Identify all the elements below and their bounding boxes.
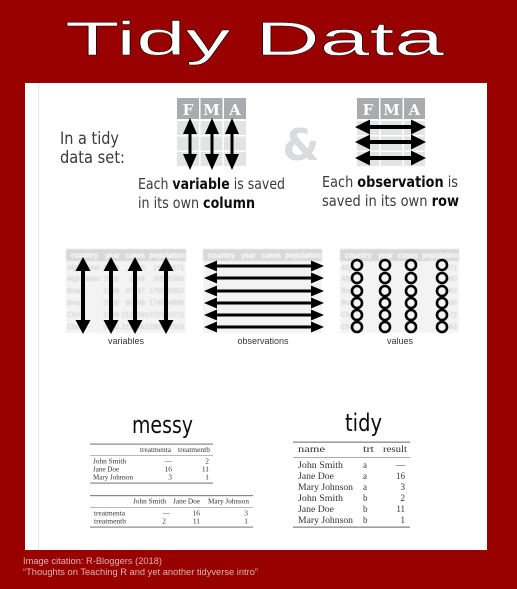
icon: column table with vertical arrows <box>177 98 246 170</box>
table: tidy: a <box>363 482 367 492</box>
diagram: variables: population <box>149 250 185 260</box>
heading: tidy: tidy <box>345 409 382 437</box>
diagram: variables: 1999 <box>103 288 119 295</box>
diagram: variables: 212258 <box>122 312 145 319</box>
heading: messy: messy <box>132 411 193 439</box>
table: messy, treatments as columns: treatmenta <box>140 445 172 454</box>
diagram: variables: 2000 <box>103 300 119 307</box>
diagram: variables: 2000 <box>103 276 119 283</box>
diagram: observations <box>203 249 324 346</box>
table: messy, treatments as columns: 11 <box>202 464 209 474</box>
diagram: variables: 20595360 <box>153 276 184 283</box>
table: messy, treatments as columns: John Smith <box>93 456 126 466</box>
table: tidy: John Smith <box>298 460 344 470</box>
table: tidy: b <box>363 493 368 503</box>
diagram: values: Bra <box>341 288 352 295</box>
table: messy, people as columns: 3 <box>244 508 248 518</box>
diagram: variables: 1999 <box>103 312 119 319</box>
diagram: values: 272 <box>445 312 457 319</box>
table: tidy: — <box>395 460 406 470</box>
table: messy, people as columns: Mary Johnson <box>208 496 249 506</box>
diagram: observations: country <box>208 250 235 260</box>
table: tidy: John Smith <box>298 493 344 503</box>
table: messy, treatments as columns: Mary Johnson <box>93 472 133 482</box>
caption: variable: Each variable is saved <box>138 175 285 193</box>
diagram: values: Chi <box>341 312 352 319</box>
icon: column table with vertical arrows: A <box>228 101 241 119</box>
diagram: values: 360 <box>445 276 457 283</box>
table: messy, people as columns: treatmenta <box>94 508 126 518</box>
diagram: variables: Afghanistan <box>67 276 100 283</box>
diagram: values: Bra <box>341 300 352 307</box>
icon: row table with horizontal arrows: M <box>383 101 400 119</box>
icon: column table with vertical arrows: M <box>203 101 220 119</box>
table: tidy: Jane Doe <box>298 471 334 481</box>
icon: row table with horizontal arrows: A <box>408 101 421 119</box>
table: messy, people as columns: John Smith <box>133 496 166 506</box>
table: messy, treatments as columns: 3 <box>168 472 172 482</box>
caption: variable: in its own column <box>138 194 255 212</box>
diagram: values: Afg <box>341 276 352 283</box>
diagram: variables <box>66 249 186 346</box>
table: messy, treatments as columns: — <box>164 456 173 466</box>
diagram: variables: year <box>105 250 121 260</box>
table: tidy: b <box>363 504 368 514</box>
title: Tidy Data <box>65 12 446 65</box>
table: messy, treatments as columns: treatmentb <box>178 445 210 454</box>
diagram: variables: 1280428583 <box>145 324 184 331</box>
panel: white content card <box>25 83 487 550</box>
table: tidy: a <box>363 471 367 481</box>
caption: variable <box>138 175 285 212</box>
table: messy, people as columns: 16 <box>193 508 200 518</box>
diagram: variables: 1999 <box>103 265 119 272</box>
diagram: variables: China <box>67 324 85 331</box>
table: tidy: 16 <box>396 471 406 481</box>
diagram: values <box>340 249 459 346</box>
diagram: variables: 80488 <box>126 300 145 307</box>
citation: Image citation: R-Bloggers (2018) <box>23 556 162 566</box>
table: tidy: 1 <box>400 515 405 525</box>
table: tidy: b <box>363 515 368 525</box>
citation <box>23 556 258 577</box>
table: messy, people as columns: treatmentb <box>94 516 126 526</box>
caption: observation <box>322 173 459 210</box>
diagram: values: country <box>345 250 372 260</box>
table: messy, treatments as columns <box>90 444 213 484</box>
diagram: values: year <box>378 250 394 260</box>
diagram: variables: Brazil <box>67 300 85 307</box>
caption: observation: Each observation is <box>322 173 458 191</box>
table: messy, treatments as columns: 2 <box>205 456 209 466</box>
table: tidy: result <box>383 444 408 454</box>
table: messy, people as columns <box>90 495 253 528</box>
table: tidy <box>293 442 410 528</box>
diagram: variables: variables <box>108 336 145 346</box>
diagram: values: 071 <box>445 265 457 272</box>
diagram: values: 898 <box>445 300 457 307</box>
table: messy, treatments as columns: 1 <box>205 472 209 482</box>
icon: row table with horizontal arrows <box>355 98 426 166</box>
diagram: variables: China <box>67 312 85 319</box>
diagram: variables: Afghanistan <box>67 265 100 272</box>
diagram: variables: country <box>71 250 98 260</box>
table: messy, people as columns: — <box>162 508 171 518</box>
caption: observation: saved in its own row <box>322 192 459 210</box>
diagram: variables: 745 <box>133 265 145 272</box>
table: tidy: 11 <box>396 504 405 514</box>
icon: ampersand: & <box>282 120 320 171</box>
table: tidy: trt <box>363 444 375 454</box>
table: messy, people as columns: 2 <box>162 516 166 526</box>
diagram: values: 362 <box>445 288 457 295</box>
table: messy, people as columns: Jane Doe <box>173 496 201 506</box>
diagram: variables: Brazil <box>67 288 85 295</box>
diagram: variables: cases <box>125 250 145 260</box>
icon: column table with vertical arrows: F <box>183 101 194 119</box>
diagram: values: Chi <box>341 324 352 331</box>
table: tidy: 2 <box>400 493 405 503</box>
table: messy, treatments as columns: 16 <box>165 464 172 474</box>
table: tidy: Mary Johnson <box>298 515 354 525</box>
intro text: data set: <box>60 148 125 168</box>
intro text <box>60 129 125 168</box>
table: messy, people as columns: 1 <box>244 516 248 526</box>
diagram: values: population <box>422 250 458 260</box>
citation: “Thoughts on Teaching R and yet another tidyverse intro” <box>23 567 258 577</box>
table: tidy: Mary Johnson <box>298 482 354 492</box>
table: messy, people as columns: 11 <box>193 516 200 526</box>
diagram: values: cases <box>398 250 418 260</box>
diagram: observations: population <box>285 250 321 260</box>
diagram: variables: 172006362 <box>149 288 184 295</box>
icon: row table with horizontal arrows: F <box>363 101 374 119</box>
diagram: variables: 2000 <box>103 324 119 331</box>
diagram: values: 583 <box>445 324 457 331</box>
table: tidy: Jane Doe <box>298 504 334 514</box>
diagram: variables: 19987071 <box>153 265 184 272</box>
diagram: variables: 37737 <box>126 288 145 295</box>
table: tidy: a <box>363 460 367 470</box>
diagram: variables: 2666 <box>129 276 145 283</box>
diagram: values: Afg <box>341 265 352 272</box>
table: tidy: 3 <box>400 482 406 492</box>
table: tidy: name <box>298 444 325 454</box>
table: messy, treatments as columns: Jane Doe <box>93 464 120 474</box>
diagram: observations: cases <box>261 250 281 260</box>
diagram: variables: 1272915272 <box>145 312 184 319</box>
diagram: observations: observations <box>237 336 289 346</box>
diagram: variables: 174504898 <box>149 300 184 307</box>
diagram: values: values <box>387 336 414 346</box>
intro text: In a tidy <box>60 129 119 149</box>
diagram: variables: 213766 <box>122 324 145 331</box>
diagram: observations: year <box>241 250 257 260</box>
